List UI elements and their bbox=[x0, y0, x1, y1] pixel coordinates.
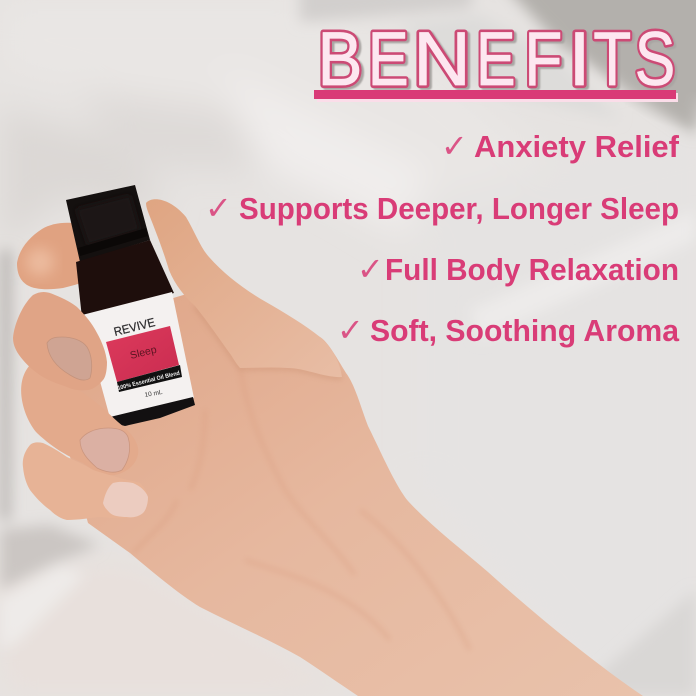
title shadow: T bbox=[596, 19, 634, 104]
benefits list bbox=[205, 127, 680, 349]
title fill: E bbox=[476, 17, 516, 102]
red panel bbox=[106, 326, 179, 382]
black band bbox=[117, 365, 182, 392]
title outline bbox=[318, 17, 675, 102]
ring finger bbox=[21, 365, 138, 475]
bottle body bbox=[76, 240, 174, 318]
title underline bbox=[314, 90, 678, 102]
title outline: N bbox=[413, 17, 471, 102]
title outline: F bbox=[524, 17, 562, 102]
title shadow bbox=[320, 19, 678, 104]
title outline: T bbox=[593, 17, 631, 102]
bottle label bbox=[82, 292, 194, 418]
band text: 100% Essential Oil Blend bbox=[117, 371, 181, 392]
benefit: anxiety relief: Anxiety Relief bbox=[474, 129, 680, 164]
title shadow: E bbox=[370, 19, 411, 104]
title outline: E bbox=[476, 17, 516, 102]
volume: 10 mL bbox=[144, 389, 163, 399]
middle finger bbox=[13, 292, 107, 390]
palm and wrist bbox=[60, 290, 643, 696]
title shadow: S bbox=[637, 19, 678, 104]
benefit: aroma: ✓ bbox=[337, 311, 364, 349]
thumb bbox=[146, 199, 342, 377]
title fill: S bbox=[635, 17, 675, 102]
title fill: T bbox=[593, 17, 631, 102]
title outline: S bbox=[635, 17, 675, 102]
title fill: E bbox=[368, 17, 409, 102]
benefit: anxiety relief: ✓ bbox=[441, 127, 468, 165]
title shadow: F bbox=[527, 19, 565, 104]
title shadow: N bbox=[416, 19, 474, 104]
title: BENEFITS bbox=[318, 17, 678, 104]
fingers over the bottle bbox=[13, 199, 342, 520]
thumb shadow bbox=[195, 306, 342, 377]
title outline: I bbox=[568, 17, 591, 102]
title fill: F bbox=[524, 17, 562, 102]
title shadow: E bbox=[478, 19, 518, 104]
title fill bbox=[318, 17, 675, 102]
bottle bbox=[66, 185, 195, 426]
benefit: deeper sleep: Supports Deeper, Longer Sleep bbox=[239, 191, 679, 226]
title fill: B bbox=[318, 17, 362, 102]
title outline: E bbox=[368, 17, 409, 102]
brand name: REVIVE bbox=[112, 315, 156, 339]
bottle cap bbox=[66, 185, 150, 262]
hand bbox=[17, 223, 643, 696]
little finger bbox=[23, 442, 148, 520]
title shadow: I bbox=[570, 19, 594, 104]
bottle base bbox=[110, 397, 195, 426]
benefit: relaxation: Full Body Relaxation bbox=[385, 252, 679, 287]
index finger bbox=[17, 223, 95, 289]
title outline: B bbox=[318, 17, 362, 102]
benefit: relaxation: ✓ bbox=[357, 250, 384, 288]
title fill: I bbox=[568, 17, 591, 102]
title fill: N bbox=[413, 17, 471, 102]
benefit: deeper sleep: ✓ bbox=[205, 189, 232, 227]
title shadow: B bbox=[320, 19, 365, 104]
palm creases bbox=[133, 368, 470, 650]
benefit: aroma: Soft, Soothing Aroma bbox=[370, 313, 680, 348]
product name: Sleep bbox=[129, 344, 158, 362]
